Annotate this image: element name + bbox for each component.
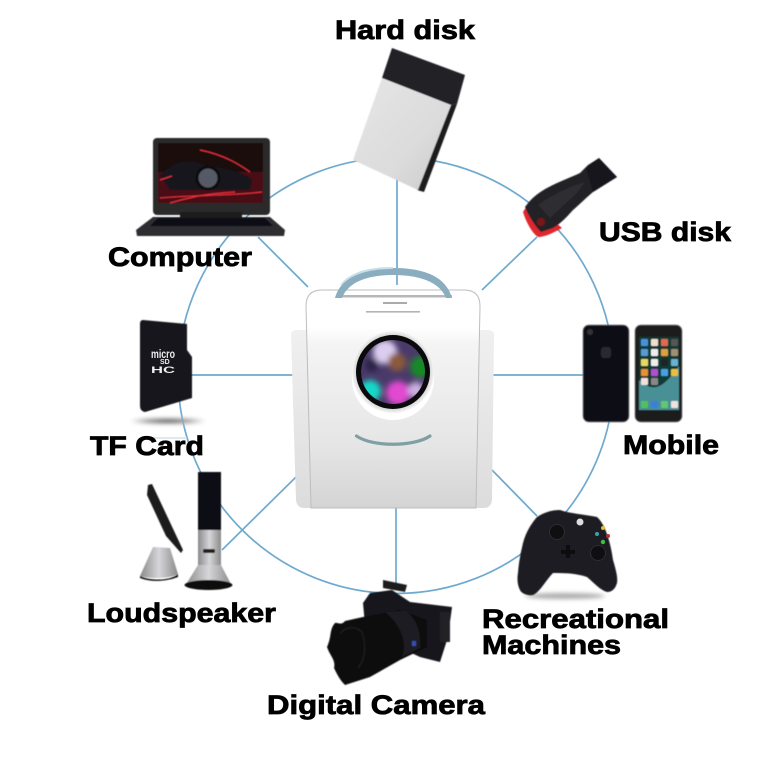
- label: Recreational Machines: Machines: [482, 630, 621, 660]
- icon: digital camera: [327, 580, 452, 685]
- label: USB disk: USB disk: [599, 217, 732, 247]
- heading: Hard disk: Hard disk: [335, 15, 476, 45]
- projector: [291, 267, 494, 508]
- projector handle: [335, 267, 452, 298]
- label: Digital Camera: Digital Camera: [267, 690, 486, 720]
- icon: loudspeaker: [140, 472, 232, 590]
- icon: TF card: micro: [151, 347, 175, 361]
- icon: mobile phones: [583, 325, 682, 422]
- label: TF Card: TF Card: [90, 431, 204, 461]
- lens: [352, 331, 434, 420]
- icon: TF card: HC: [151, 365, 176, 375]
- connection diagram: [153, 158, 614, 594]
- label: Computer: Computer: [108, 242, 253, 272]
- icon: USB disk: [523, 158, 617, 237]
- smile indicator: [356, 436, 430, 444]
- label: Recreational Machines: Recreational: [482, 604, 669, 634]
- label: Loudspeaker: Loudspeaker: [87, 598, 277, 628]
- icon: game controller: [518, 510, 617, 599]
- icon: TF card: [129, 320, 207, 424]
- label: Recreational Machines: [482, 604, 669, 660]
- projector sides: [291, 330, 494, 508]
- icon: laptop computer: [136, 138, 285, 236]
- icon: TF card: SD: [160, 359, 170, 366]
- label: Mobile: Mobile: [623, 430, 719, 460]
- projector front: [306, 290, 480, 508]
- icon: hard disk: [353, 48, 465, 192]
